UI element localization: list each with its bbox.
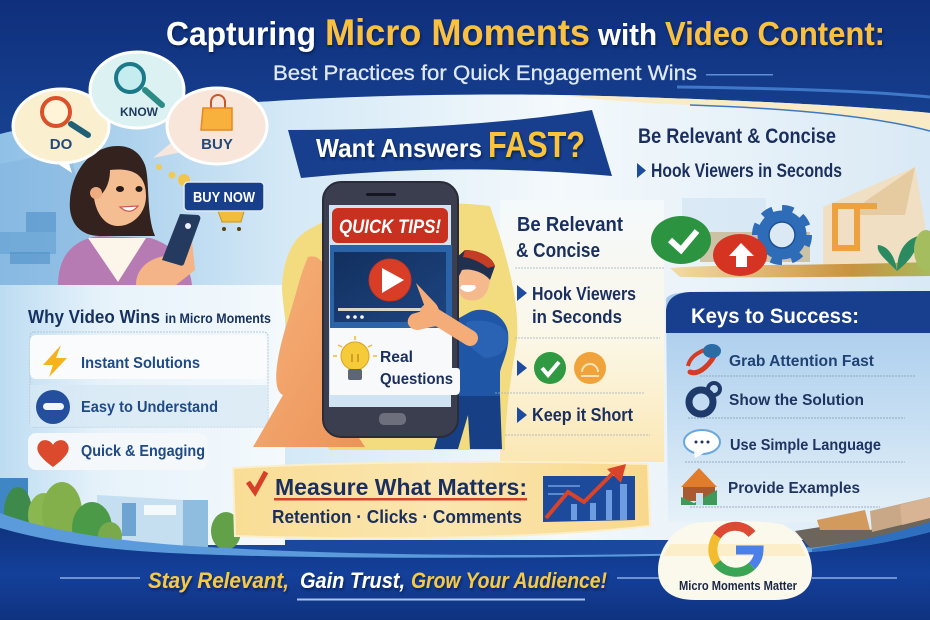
real questions card: Real [380,349,413,366]
bubble: know [90,52,184,128]
bottom blue band [0,513,930,620]
item: instant solutions [30,335,267,379]
google logo [713,526,759,572]
heading: Measure What Matters: [275,474,527,500]
bubble: do: DO [50,136,73,153]
panel header: Keys to Success: [691,305,859,328]
quick tips label: QUICK TIPS! [339,217,441,238]
status icons row [517,352,606,384]
illustration: woman with phone [58,146,200,285]
illustration: boxes bottom right [795,497,930,552]
illustration: smartphone [323,182,460,437]
key: show the solution [688,383,905,418]
footer tagline: Stay Relevant, [148,568,289,593]
heading: be relevant top right: Be Relevant & Concise [638,125,836,148]
item: easy to understand: Easy to Understand [81,399,218,416]
title: Video Content: [665,15,885,52]
title: Micro Moments [325,12,590,53]
yellow blob behind phone [282,203,517,450]
item: easy to understand [30,385,268,427]
real questions card [330,328,460,395]
panel: why video wins [0,285,285,545]
bubble: buy: BUY [201,136,233,153]
tip: hook viewers: in Seconds [532,307,622,327]
tip: hook viewers top right: Hook Viewers in Seconds [651,161,842,182]
banner: want answers fast: Want Answers [316,133,482,163]
item: quick and engaging [28,433,207,470]
tip: hook viewers [517,284,636,327]
bubble: know: KNOW [120,105,159,119]
footer tagline: Gain Trust, [300,568,405,593]
bubble: do [13,89,109,173]
key: use simple language: Use Simple Language [730,437,881,454]
check mark [248,472,266,492]
button: buy now with cart [156,164,264,231]
title: Capturing [166,15,316,52]
metrics: Retention · Clicks · Comments [272,507,522,527]
banner: want answers fast [288,110,612,178]
badge: micro moments matter: Micro Moments Matter [679,578,797,593]
real questions card: Questions [380,371,453,388]
heading: be relevant and concise: Be Relevant [517,214,623,236]
panel heading [28,307,271,327]
item: instant solutions: Instant Solutions [81,355,200,372]
footer tagline: Grow Your Audience! [411,568,607,593]
panel: keys to success [666,291,930,522]
column: tips list [495,214,664,435]
item: quick and engaging: Quick & Engaging [81,443,205,460]
light central area [0,87,930,540]
key: provide examples [681,468,880,507]
bubble: buy [153,88,267,164]
subtitle: Best Practices for Quick Engagement Wins [273,62,697,85]
badge: micro moments matter [658,521,812,600]
title [166,12,885,53]
button: buy now with cart: BUY NOW [193,189,256,206]
heading: be relevant and concise [516,214,623,262]
illustration: building and plant [670,167,930,277]
tip: hook viewers: Hook Viewers [532,284,636,304]
speech bubbles do know buy [13,52,267,173]
man's arm and pointing finger [408,283,508,358]
title: with [597,17,657,52]
heading: be relevant and concise: & Concise [516,240,600,262]
illustration: buildings and trees [0,478,241,554]
illustration: man [434,250,508,449]
panel header [666,291,930,333]
tip: keep it short: Keep it Short [532,405,633,425]
panel: measure what matters [233,462,650,538]
footer tagline [60,568,897,600]
video player [330,245,452,328]
growth chart [543,464,635,522]
panel heading: Why Video Wins [28,307,160,327]
key: use simple language [684,430,905,462]
quick tips label [332,208,448,243]
panel heading: in Micro Moments [165,310,271,326]
subtitle side rule [706,74,773,76]
key: show the solution: Show the Solution [729,392,864,409]
key: provide examples: Provide Examples [728,480,860,497]
key: grab attention fast: Grab Attention Fast [729,353,875,370]
illustration: hand holding phone [253,256,365,447]
banner: want answers fast: FAST? [488,124,585,165]
key: grab attention fast [688,344,915,376]
column background: tips [500,200,664,462]
icons: check arrow gear [651,198,810,276]
